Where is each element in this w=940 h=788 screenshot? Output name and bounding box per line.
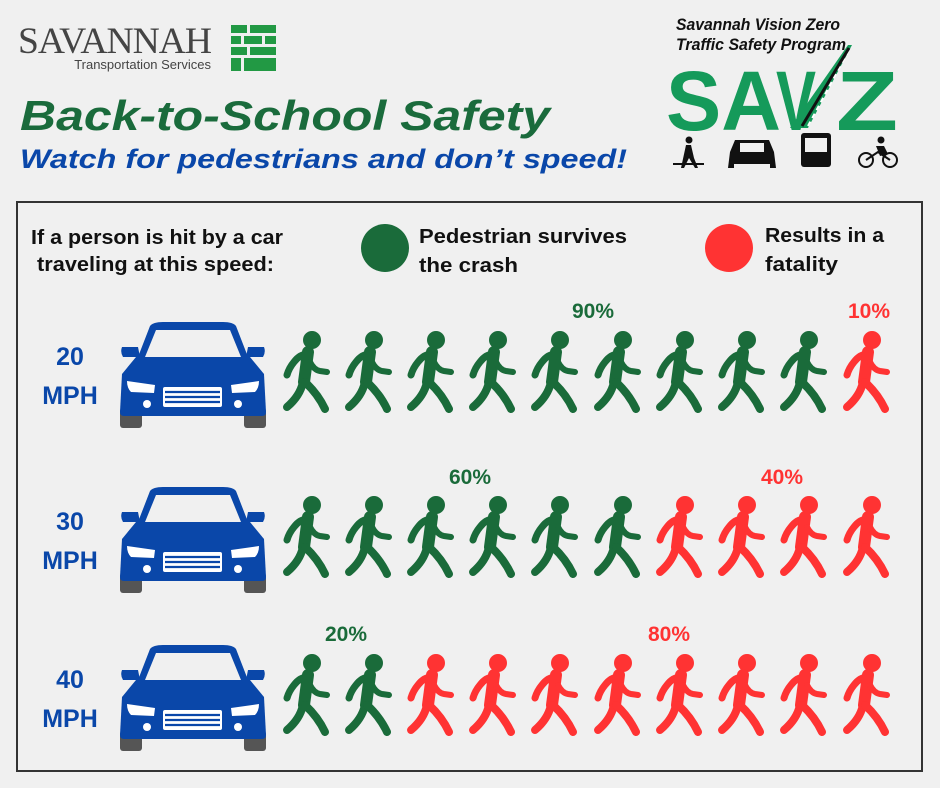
- logo: SAVZ Vision Zero: SA: [666, 54, 781, 148]
- intro text: traveling at this speed:: [37, 254, 274, 276]
- row: 30 MPH: MPH: [42, 547, 98, 575]
- row: 40 MPH: 40: [56, 666, 84, 694]
- logo: Savannah Transportation Services: Transportation Services: [74, 57, 211, 72]
- logo: SAVZ Vision Zero: Savannah Vision Zero: [676, 15, 840, 34]
- row: 30 MPH: 30: [56, 508, 84, 536]
- row: 20 MPH: MPH: [42, 382, 98, 410]
- title: Back-to-School Safety: [20, 92, 553, 139]
- logo: SAVZ Vision Zero: [666, 15, 898, 168]
- logo: SAVZ Vision Zero: Traffic Safety Program: [676, 35, 846, 54]
- logo: Savannah Transportation Services: [18, 21, 276, 72]
- row: 40 MPH: 20%: [325, 623, 367, 646]
- icons: pedestrian car bus bike: [673, 133, 888, 168]
- intro text: If a person is hit by a car: [31, 227, 283, 249]
- row: 20 MPH: 90%: [572, 300, 614, 323]
- row: 40 MPH: MPH: [42, 705, 98, 733]
- logo: Savannah Transportation Services: SAVANNAH: [18, 21, 211, 62]
- row: 40 MPH: [42, 623, 887, 751]
- legend: survives: [361, 224, 627, 277]
- row: 20 MPH: 10%: [848, 300, 890, 323]
- legend: survives: Pedestrian survives: [419, 226, 627, 248]
- logo: SAVZ Vision Zero: V: [776, 54, 816, 148]
- subtitle: Watch for pedestrians and don’t speed!: [20, 144, 627, 174]
- row: 30 MPH: 60%: [449, 466, 491, 489]
- legend: fatality: [705, 224, 885, 276]
- intro text: [31, 227, 283, 276]
- row: 40 MPH: 80%: [648, 623, 690, 646]
- legend: fatality: Results in a: [765, 225, 885, 247]
- legend: survives: the crash: [419, 255, 518, 277]
- logo: SAVZ Vision Zero: Z: [836, 54, 898, 148]
- row: 20 MPH: 20: [56, 343, 84, 371]
- row: 20 MPH: [42, 300, 890, 428]
- legend: fatality: fatality: [765, 254, 839, 276]
- row: 30 MPH: [42, 466, 887, 593]
- main panel: [17, 202, 922, 771]
- row: 30 MPH: 40%: [761, 466, 803, 489]
